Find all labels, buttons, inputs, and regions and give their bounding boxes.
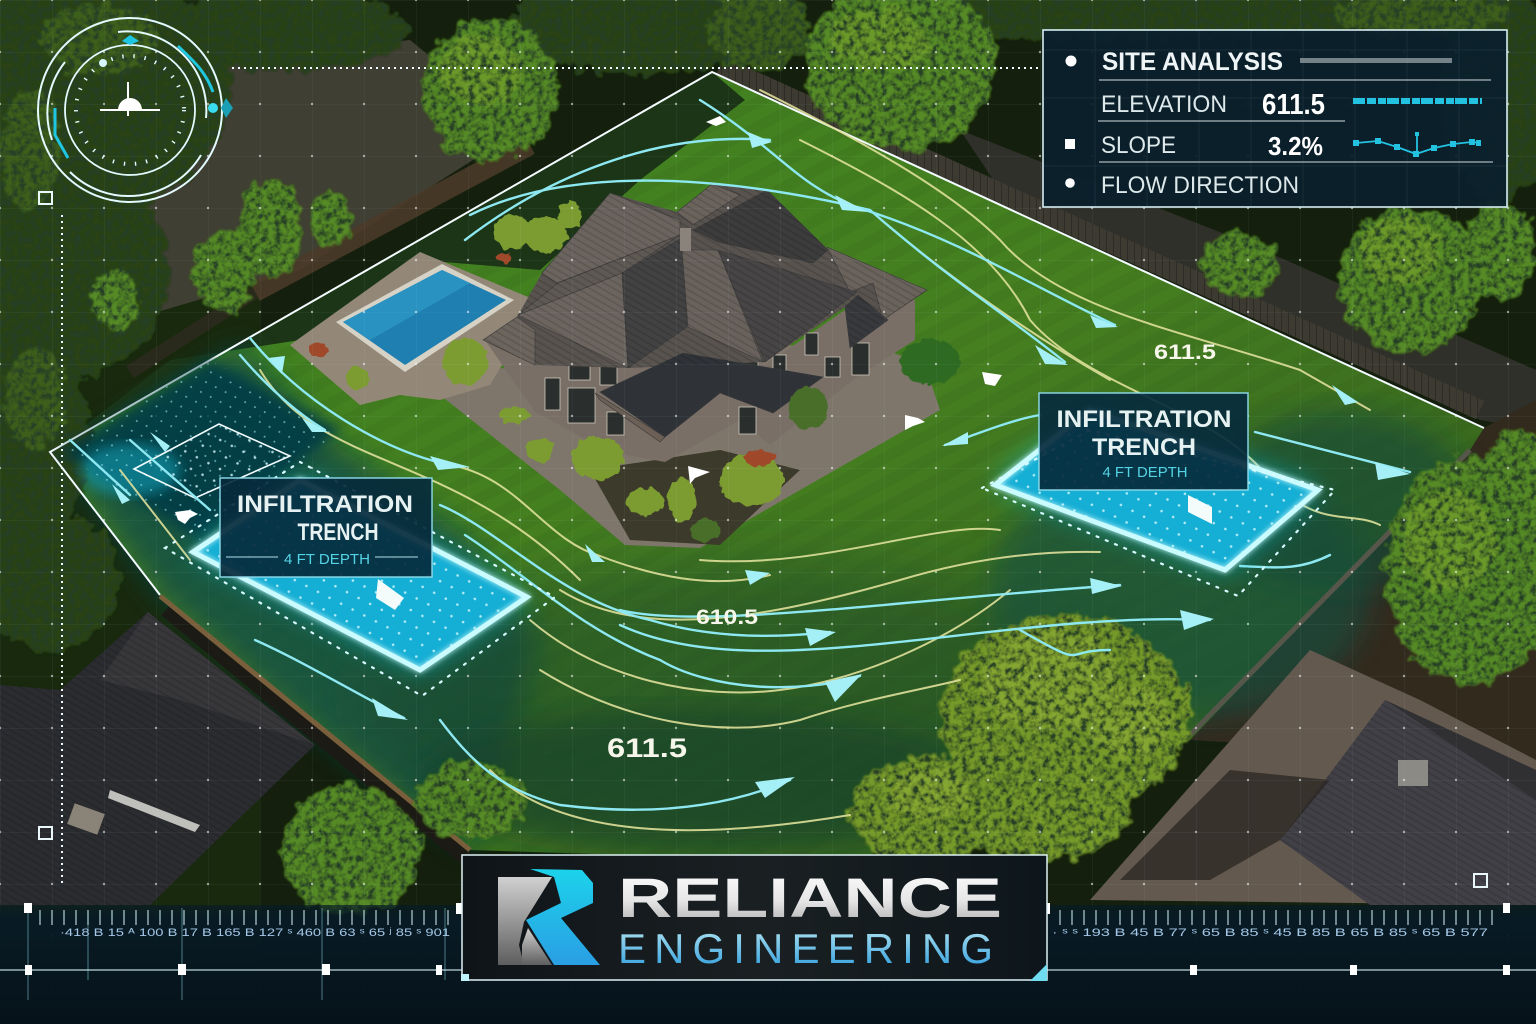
cyan flow lines bbox=[70, 100, 1410, 810]
elevation label 611.5 lower: 611.5 bbox=[607, 733, 687, 763]
patio and pool deck bbox=[290, 252, 940, 548]
parcel outline bbox=[50, 72, 1484, 595]
mid tree masses bbox=[0, 0, 1510, 450]
house roofs bbox=[483, 184, 927, 442]
elevation label 610.5: 610.5 bbox=[696, 606, 758, 629]
ruler: right: · ˢ ˢ 193 B 45 B 77 ˢ 65 B 85 ˢ 45 B 85 B 65 B 85 ˢ 65 B 577 bbox=[1052, 927, 1488, 939]
logo wordmark: RELIANCE: RELIANCE bbox=[618, 866, 1002, 929]
garden shrubs bbox=[309, 201, 960, 542]
dark tree band: top and left bbox=[0, 0, 1536, 650]
bullets bbox=[1065, 56, 1076, 188]
logo panel corner marks bbox=[461, 964, 1047, 981]
compass dial bbox=[38, 18, 233, 202]
heading rule bbox=[1300, 58, 1452, 63]
callout: right infiltration trench: 4 FT DEPTH bbox=[1102, 464, 1188, 481]
neighbouring yard: lower right soil bbox=[1190, 400, 1536, 760]
callout: right infiltration trench bbox=[1039, 393, 1248, 490]
chimney bbox=[680, 228, 691, 251]
house roof texture bbox=[483, 184, 927, 368]
logo mark: R bbox=[498, 869, 600, 965]
logo panel bbox=[461, 855, 1047, 981]
swimming pool bbox=[336, 264, 514, 372]
neighbouring yard: upper right bbox=[960, 130, 1536, 430]
flow direction row: FLOW DIRECTION bbox=[1101, 172, 1299, 199]
lawn shading bbox=[50, 72, 1470, 850]
neighbouring roof: lower left bbox=[0, 612, 315, 905]
dashed boundary guide lines bbox=[62, 68, 1040, 885]
lawn mowing stripes bbox=[50, 72, 1484, 862]
ruler: left bbox=[0, 903, 463, 1000]
panel: site analysis: 611.5 bbox=[1262, 89, 1325, 121]
elevation row: ELEVATION bbox=[1101, 91, 1227, 118]
panel: site analysis: 3.2% bbox=[1268, 131, 1323, 161]
ruler: right bbox=[1043, 903, 1536, 975]
callout: left infiltration trench: 4 FT DEPTH bbox=[284, 551, 370, 568]
logo wordmark: ENGINEERING: ENGINEERING bbox=[618, 925, 993, 972]
house bbox=[483, 184, 927, 462]
fences bbox=[130, 66, 1480, 862]
callout: right infiltration trench: TRENCH bbox=[1092, 434, 1196, 461]
yellow contour lines bbox=[120, 90, 1380, 830]
flow arrowheads bbox=[112, 132, 1410, 798]
small white flow markers bbox=[175, 116, 1002, 524]
neighbouring yard and roof: lower right bbox=[1090, 650, 1536, 905]
slope sparkline bbox=[1353, 132, 1481, 157]
callout: left infiltration trench bbox=[220, 478, 432, 577]
flow contour lines bbox=[70, 90, 1410, 830]
ruler: left: ·418 B 15 ᴬ 100 B 17 B 165 B 127 ˢ 460 B 63 ˢ 65 ʲ 85 ˢ 901 bbox=[60, 927, 450, 939]
corner markers bbox=[39, 192, 1487, 887]
analysis plot: upper-left dotted grid bbox=[60, 360, 340, 540]
callout: right infiltration trench: INFILTRATION bbox=[1056, 406, 1232, 433]
slope row: SLOPE bbox=[1101, 132, 1176, 159]
callout: left infiltration trench: TRENCH bbox=[298, 519, 378, 546]
large foreground tree bbox=[850, 615, 1190, 865]
house walls bbox=[485, 300, 915, 462]
bottom dark band bbox=[0, 905, 1536, 1024]
panel: site analysis bbox=[1043, 30, 1507, 207]
right infiltration trench bbox=[982, 410, 1335, 596]
elevation label 611.5 upper right: 611.5 bbox=[1154, 341, 1216, 364]
house windows bbox=[543, 333, 869, 435]
elevation sparkline bbox=[1353, 98, 1482, 104]
site analysis heading: SITE ANALYSIS bbox=[1102, 48, 1283, 76]
lawn parcel bbox=[50, 72, 1484, 862]
left infiltration trench bbox=[165, 462, 555, 696]
callout: left infiltration trench: INFILTRATION bbox=[237, 491, 413, 518]
neighbouring yard: upper left bbox=[120, 40, 520, 320]
